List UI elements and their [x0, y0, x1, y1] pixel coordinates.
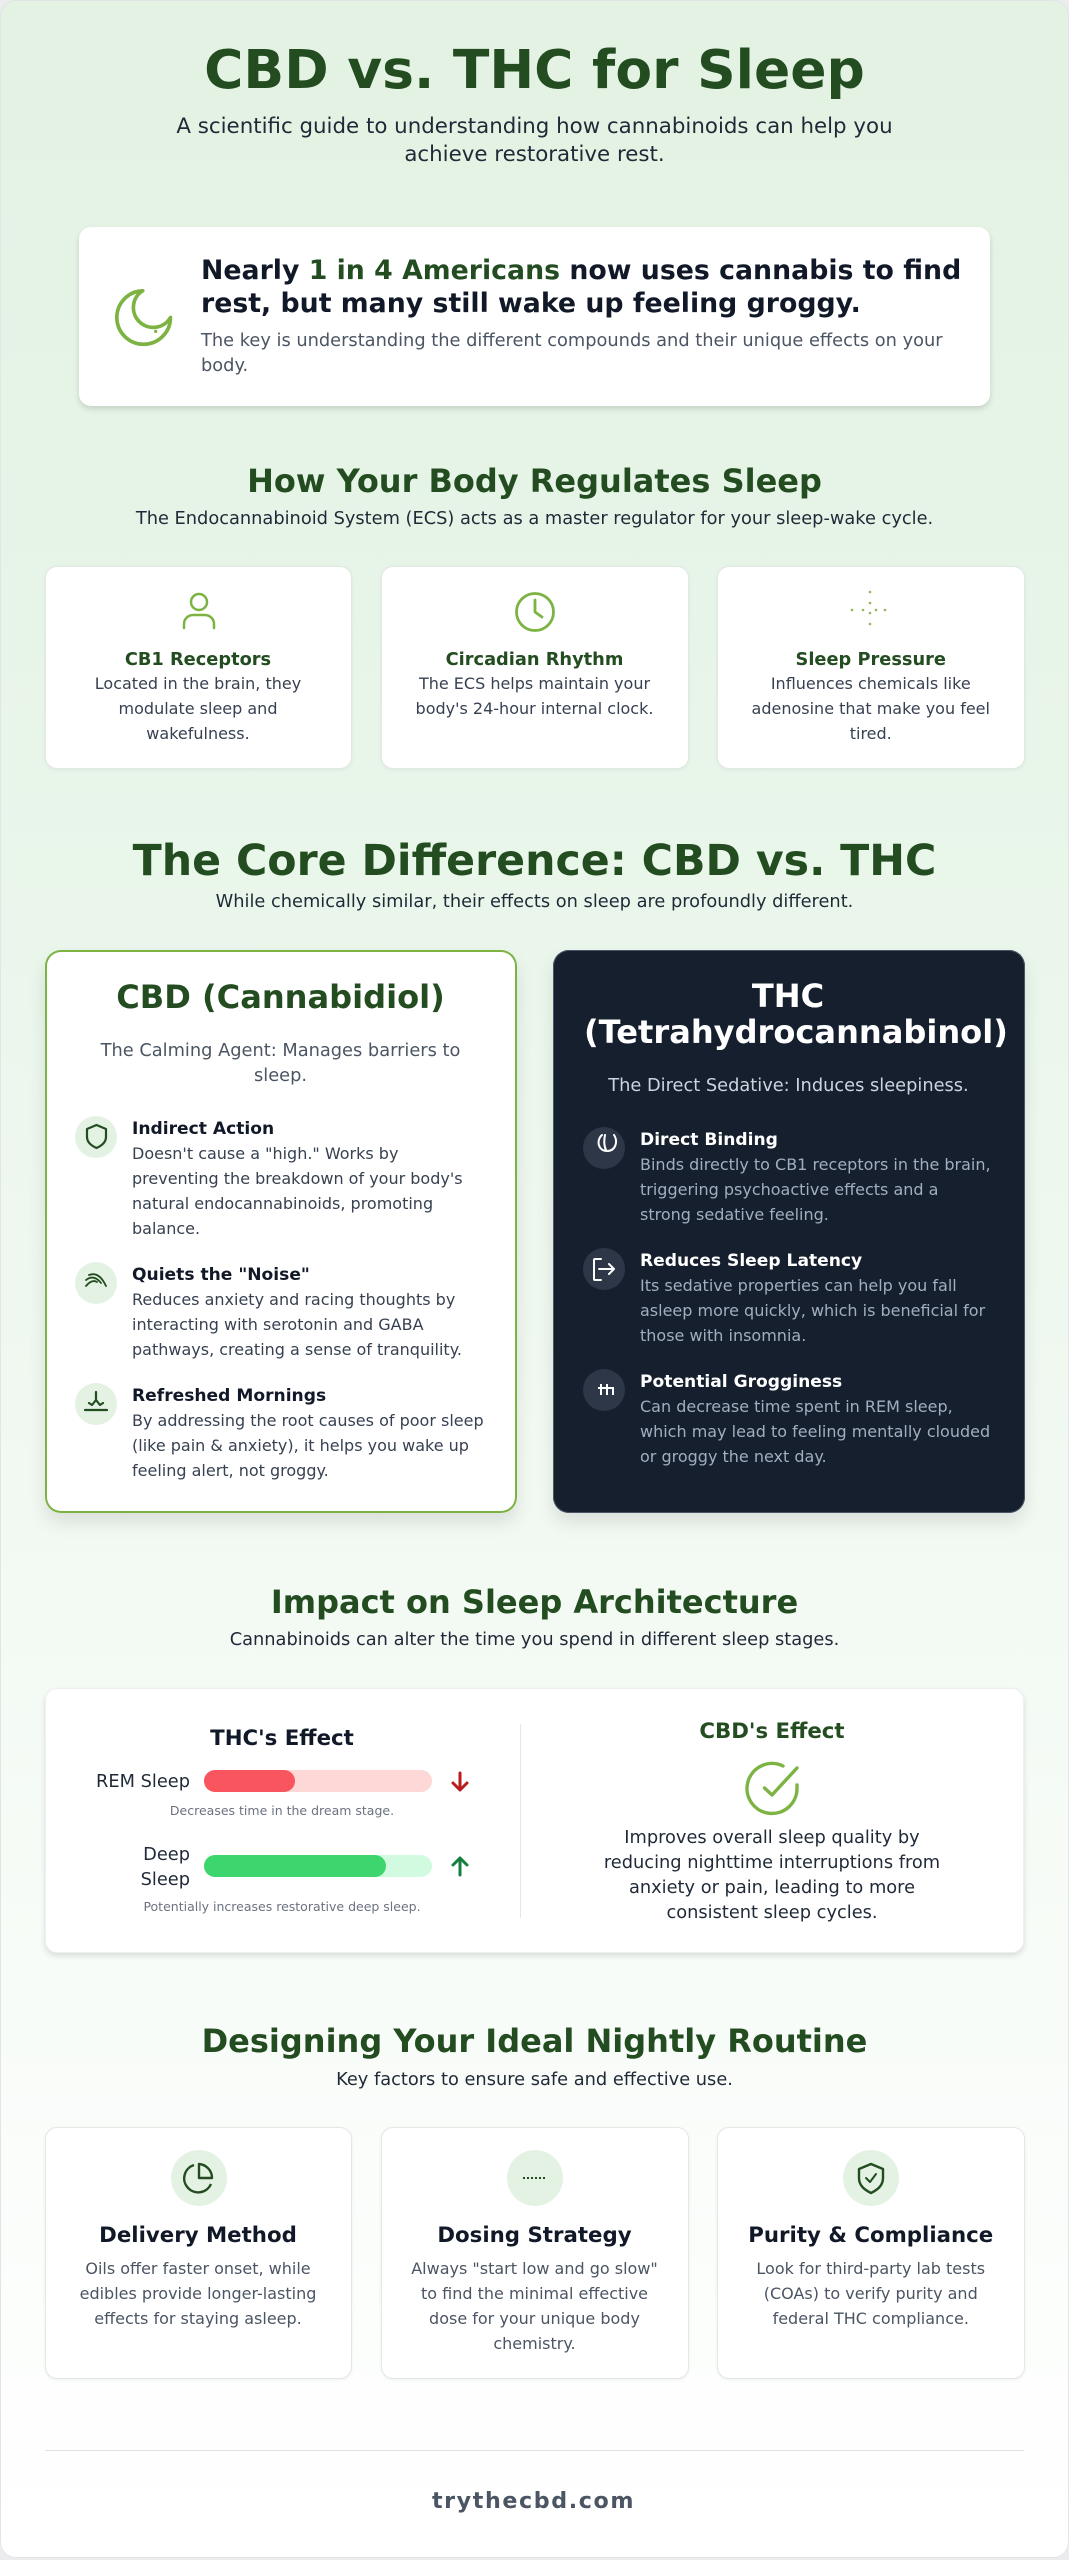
point text: feeling alert, not groggy.	[132, 1460, 329, 1480]
point text	[640, 1154, 991, 1224]
divider line	[520, 1724, 521, 1918]
CBD effect text	[604, 1827, 940, 1923]
THC effect heading: THC's Effect	[210, 1726, 354, 1751]
callout text	[200, 330, 943, 376]
card text: to find the minimal effective	[421, 2284, 648, 2303]
icon: scattered dots	[850, 590, 886, 626]
point text: natural endocannabinoids, promoting	[132, 1194, 433, 1212]
CBD effect text: consistent sleep cycles.	[666, 1902, 878, 1923]
THC point: sleep latency	[583, 1248, 986, 1344]
card text: edibles provide longer-lasting	[80, 2284, 316, 2303]
point text: pathways, creating a sense of tranquility.	[132, 1340, 462, 1358]
subtitle	[176, 114, 893, 167]
card text	[80, 2259, 316, 2328]
point text: Reduces anxiety and racing thoughts by	[132, 1290, 455, 1308]
icon: sunrise	[75, 1383, 117, 1425]
card title: Dosing Strategy	[437, 2223, 632, 2248]
bar caption: Potentially increases restorative deep sleep.	[143, 1899, 421, 1914]
point text: Its sedative properties can help you fall	[640, 1276, 957, 1294]
point text	[640, 1396, 990, 1466]
icon: crescent moon	[115, 288, 172, 346]
card title: CB1 Receptors	[125, 649, 271, 670]
point text: Can decrease time spent in REM sleep,	[640, 1396, 953, 1416]
icon: clock	[515, 592, 555, 632]
THC heading: THC	[752, 977, 824, 1015]
point text	[132, 1290, 462, 1358]
point text	[132, 1410, 484, 1480]
card text: Oils offer faster onset, while	[85, 2259, 311, 2278]
card text: adenosine that make you feel	[752, 699, 990, 718]
icon: receptor binding	[583, 1127, 625, 1169]
card text: effects for staying asleep.	[94, 2309, 302, 2328]
panel: THC	[552, 950, 1024, 1512]
panel: intro callout	[79, 227, 990, 406]
icon: exit arrow	[583, 1248, 625, 1290]
card text: chemistry.	[493, 2334, 576, 2353]
icon: dotted line	[506, 2150, 562, 2206]
CBD tagline	[100, 1040, 460, 1086]
icon: up arrow	[451, 1856, 469, 1876]
card text: Look for third-party lab tests	[756, 2259, 985, 2278]
THC point: potential grogginess	[583, 1369, 990, 1466]
heading: how your body regulates sleep: How Your Body Regulates Sleep	[247, 462, 822, 500]
point title: Indirect Action	[132, 1119, 274, 1139]
card: circadian rhythm	[380, 566, 688, 768]
icon: bed	[583, 1369, 625, 1411]
heading: impact on sleep architecture: Impact on Sleep Architecture	[271, 1582, 798, 1620]
bar label: Deep	[143, 1844, 190, 1865]
icon: shield	[75, 1116, 117, 1158]
callout text: body.	[201, 355, 248, 376]
icon: down arrow	[451, 1772, 469, 1792]
card text: (COAs) to verify purity and	[764, 2284, 978, 2303]
card text: The ECS helps maintain your	[419, 674, 650, 693]
bar label	[141, 1844, 190, 1890]
bar chart: REM sleep	[96, 1770, 469, 1818]
CBD effect text: Improves overall sleep quality by	[624, 1827, 920, 1848]
icon: person	[182, 592, 216, 630]
icon: pie chart	[170, 2150, 226, 2206]
THC heading	[584, 977, 1008, 1051]
card title: Delivery Method	[99, 2223, 297, 2248]
icon: check circle	[745, 1762, 799, 1816]
bar caption: Decreases time in the dream stage.	[170, 1803, 394, 1818]
card text: Influences chemicals like	[771, 674, 971, 693]
card: dosing strategy	[380, 2127, 688, 2378]
panel: sleep architecture	[45, 1688, 1024, 1953]
card title: Sleep Pressure	[796, 649, 946, 670]
point text: By addressing the root causes of poor sleep	[132, 1410, 484, 1430]
CBD effect heading: CBD's Effect	[699, 1719, 845, 1744]
point title: Quiets the "Noise"	[132, 1265, 310, 1285]
card title: Purity & Compliance	[748, 2223, 993, 2248]
point text: (like pain & anxiety), it helps you wake up	[132, 1436, 469, 1454]
point text: triggering psychoactive effects and a	[640, 1180, 938, 1198]
point text: strong sedative feeling.	[640, 1204, 829, 1224]
point text: Doesn't cause a "high." Works by	[132, 1144, 398, 1162]
card title: Circadian Rhythm	[446, 649, 623, 670]
card: CB1 receptors	[44, 566, 352, 768]
bar label: Sleep	[141, 1869, 190, 1890]
card text	[411, 2259, 658, 2353]
section intro: ECS: The Endocannabinoid System (ECS) acts as a master regulator for your sleep-wake cycle.	[136, 508, 933, 529]
card text: wakefulness.	[146, 724, 250, 743]
card text: Located in the brain, they	[95, 674, 301, 693]
callout text: The key is understanding the different compounds and their unique effects on your	[201, 330, 943, 351]
CBD tagline: The Calming Agent: Manages barriers to	[101, 1040, 460, 1061]
card text: Always "start low and go slow"	[411, 2259, 658, 2278]
card text	[95, 674, 301, 743]
point text: asleep more quickly, which is beneficial for	[640, 1300, 985, 1320]
subtitle: achieve restorative rest.	[404, 142, 665, 167]
bar track and fill	[204, 1770, 432, 1792]
card text	[416, 674, 653, 718]
CBD effect text: anxiety or pain, leading to more	[629, 1877, 915, 1898]
footer rule	[45, 2450, 1024, 2451]
icon: shield check	[843, 2150, 899, 2206]
card text: modulate sleep and	[119, 699, 277, 718]
point text: or groggy the next day.	[640, 1446, 827, 1466]
card text: dose for your unique body	[429, 2309, 640, 2328]
point text: preventing the breakdown of your body's	[132, 1168, 463, 1188]
bar track and fill	[204, 1855, 432, 1877]
card text	[752, 674, 990, 743]
bar chart: deep sleep	[141, 1844, 469, 1914]
card text: body's 24-hour internal clock.	[416, 699, 653, 718]
point text: Binds directly to CB1 receptors in the brain,	[640, 1154, 991, 1174]
footer: website: trythecbd.com	[432, 2488, 635, 2514]
point text	[132, 1144, 463, 1238]
point text: balance.	[132, 1218, 200, 1238]
THC tagline: The Direct Sedative: Induces sleepiness.	[608, 1075, 969, 1096]
section intro: routine: Key factors to ensure safe and effective use.	[336, 2069, 733, 2090]
point text: which may lead to feeling mentally clouded	[640, 1422, 990, 1440]
point title: Reduces Sleep Latency	[640, 1251, 862, 1271]
card: purity and compliance	[717, 2127, 1024, 2378]
point text	[640, 1276, 986, 1344]
CBD point: refreshed mornings	[75, 1383, 484, 1480]
bar label: REM Sleep	[96, 1771, 190, 1792]
subtitle: A scientific guide to understanding how cannabinoids can help you	[176, 114, 893, 139]
heading: the core difference: The Core Difference: CBD vs. THC	[133, 836, 936, 886]
card: sleep pressure	[717, 566, 1024, 768]
card: delivery method	[44, 2127, 352, 2378]
THC heading: (Tetrahydrocannabinol)	[584, 1013, 1008, 1051]
CBD tagline: sleep.	[254, 1065, 307, 1086]
point title: Potential Grogginess	[640, 1372, 842, 1392]
CBD effect text: reducing nighttime interruptions from	[604, 1852, 940, 1873]
callout headline: rest, but many still wake up feeling groggy.	[201, 288, 861, 319]
card text: federal THC compliance.	[773, 2309, 969, 2328]
card text	[756, 2259, 985, 2328]
callout headline: Nearly 1 in 4 Americans now uses cannabis to find	[201, 255, 961, 286]
point title: Direct Binding	[640, 1130, 778, 1150]
callout headline	[201, 255, 961, 319]
heading: designing your ideal nightly routine: Designing Your Ideal Nightly Routine	[202, 2022, 867, 2060]
section intro: impact: Cannabinoids can alter the time you spend in different sleep stages.	[230, 1629, 839, 1650]
point text: those with insomnia.	[640, 1326, 806, 1344]
point title: Refreshed Mornings	[132, 1386, 326, 1406]
title: CBD vs. THC for Sleep	[204, 38, 865, 101]
THC point: direct binding	[583, 1127, 991, 1224]
section intro: core difference: While chemically similar, their effects on sleep are profoundly different.	[216, 891, 853, 912]
panel: CBD	[44, 950, 516, 1512]
icon: wind curves	[75, 1262, 117, 1304]
CBD heading: CBD (Cannabidiol)	[116, 978, 445, 1016]
CBD point: quiets the noise	[75, 1262, 462, 1358]
card text: tired.	[850, 724, 892, 743]
point text: interacting with serotonin and GABA	[132, 1314, 424, 1334]
CBD point: indirect action	[75, 1116, 463, 1238]
